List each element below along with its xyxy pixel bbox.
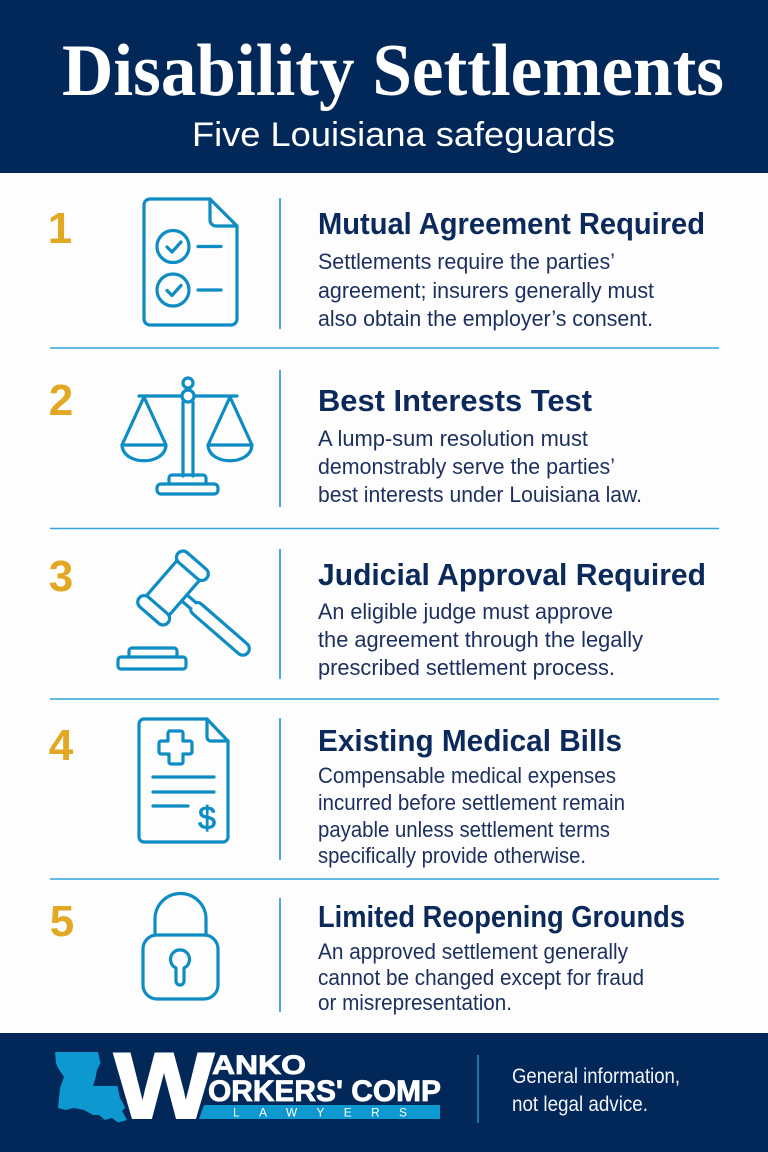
number 3: 3 xyxy=(49,552,73,601)
body text: best interests under Louisiana law. xyxy=(318,482,642,507)
icon: gavel xyxy=(118,548,271,680)
heading: Limited Reopening Grounds xyxy=(318,899,685,934)
heading: Existing Medical Bills xyxy=(318,723,622,758)
icon: medical bill: $ xyxy=(198,800,216,836)
body text: payable unless settlement terms xyxy=(318,817,610,842)
panel: safeguard 1 xyxy=(48,199,705,331)
icon: scales of justice xyxy=(122,378,252,494)
icon: medical bill xyxy=(139,719,228,842)
body text: An eligible judge must approve xyxy=(318,599,613,624)
heading: Judicial Approval Required xyxy=(318,557,706,592)
icon: Louisiana state shape xyxy=(55,1052,127,1122)
body text: demonstrably serve the parties’ xyxy=(318,454,615,479)
body text xyxy=(318,763,625,868)
body text: cannot be changed except for fraud xyxy=(318,965,644,990)
logo ribbon: LAWYERS xyxy=(233,1106,407,1120)
body text: prescribed settlement process. xyxy=(318,655,615,680)
header banner xyxy=(0,0,768,173)
body text xyxy=(318,599,644,680)
body text: specifically provide otherwise. xyxy=(318,843,586,868)
disclaimer: General information, xyxy=(512,1065,680,1088)
disclaimer: not legal advice. xyxy=(512,1093,648,1116)
body text xyxy=(318,939,644,1015)
logo wordmark xyxy=(114,1033,441,1138)
number 5: 5 xyxy=(50,897,74,946)
body text: agreement; insurers generally must xyxy=(318,278,655,303)
footer band xyxy=(0,1033,768,1152)
logo xyxy=(55,1033,441,1138)
body text xyxy=(318,426,642,507)
logo wordmark: ANKO xyxy=(212,1050,306,1080)
body text: also obtain the employer’s consent. xyxy=(318,306,653,331)
logo ribbon xyxy=(199,1105,440,1120)
body text xyxy=(318,249,655,331)
subtitle: Five Louisiana safeguards xyxy=(192,116,615,154)
body text: incurred before settlement remain xyxy=(318,790,625,815)
panel: safeguard 3 xyxy=(49,548,706,680)
logo wordmark: ORKERS' COMP xyxy=(208,1075,441,1108)
title: Disability Settlements xyxy=(62,30,724,112)
disclaimer xyxy=(512,1065,680,1116)
body text: or misrepresentation. xyxy=(318,990,512,1015)
body text: Settlements require the parties’ xyxy=(318,249,615,274)
body text: Compensable medical expenses xyxy=(318,763,616,788)
heading: Best Interests Test xyxy=(318,383,592,418)
panel: safeguard 4 xyxy=(49,719,625,868)
heading: Mutual Agreement Required xyxy=(318,206,705,241)
icon: padlock xyxy=(143,894,218,999)
body text: A lump-sum resolution must xyxy=(318,426,589,451)
icon: checklist document xyxy=(144,199,237,325)
logo wordmark: W xyxy=(114,1033,214,1138)
panel: safeguard 5 xyxy=(50,894,685,1015)
body text: An approved settlement generally xyxy=(318,939,629,964)
number 2: 2 xyxy=(49,376,73,425)
number 1: 1 xyxy=(48,204,72,253)
number 4: 4 xyxy=(49,721,74,770)
panel: safeguard 2 xyxy=(49,376,642,507)
body text: the agreement through the legally xyxy=(318,627,644,652)
